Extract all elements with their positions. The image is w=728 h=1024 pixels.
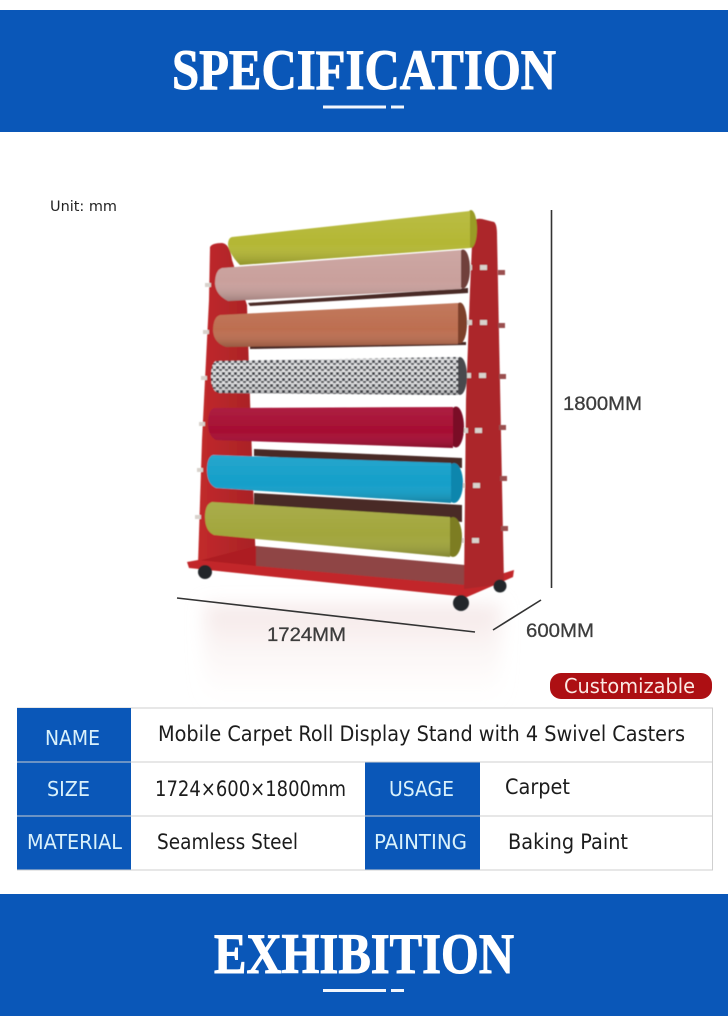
row: size and usage: SIZE bbox=[47, 777, 90, 801]
specification table bbox=[17, 708, 712, 870]
dimension: depth bbox=[493, 600, 594, 642]
row: name bbox=[45, 722, 685, 750]
bolts bbox=[195, 265, 508, 543]
header band: specification bbox=[0, 10, 728, 132]
floor reflection bbox=[205, 605, 500, 705]
title: specification: SPECIFICATION bbox=[172, 39, 556, 102]
title: exhibition: EXHIBITION bbox=[214, 923, 514, 986]
dimension: depth: 600MM bbox=[526, 620, 594, 642]
row: material and painting bbox=[27, 830, 628, 854]
product: carpet roll display stand bbox=[187, 210, 514, 611]
roll: lime bbox=[228, 210, 477, 265]
row: material and painting: Baking Paint bbox=[508, 830, 628, 854]
roll: pink bbox=[215, 250, 470, 301]
base plate bbox=[187, 560, 514, 597]
footer band: exhibition bbox=[0, 894, 728, 1016]
row: name: Mobile Carpet Roll Display Stand with 4 Swivel Casters bbox=[158, 722, 685, 746]
label cells bbox=[17, 708, 480, 870]
casters bbox=[198, 565, 506, 611]
dimension: width: 1724MM bbox=[267, 624, 346, 646]
roll: crimson bbox=[208, 406, 464, 448]
roll: olive bbox=[205, 502, 462, 557]
base shelf bbox=[256, 546, 465, 586]
roll: houndstooth bbox=[211, 357, 467, 395]
title underline bbox=[323, 106, 404, 108]
row: size and usage bbox=[47, 775, 570, 801]
back shadows bbox=[248, 288, 468, 522]
row: size and usage: USAGE bbox=[389, 777, 454, 801]
right frame bbox=[464, 219, 504, 589]
row: size and usage: Carpet bbox=[505, 775, 570, 799]
roll: terracotta bbox=[213, 302, 467, 347]
left frame bbox=[198, 243, 256, 567]
dimension: width bbox=[177, 598, 475, 646]
customizable badge: Customizable bbox=[564, 674, 695, 698]
unit note: Unit: mm bbox=[50, 199, 117, 215]
title underline bbox=[323, 989, 404, 992]
row: material and painting: Seamless Steel bbox=[157, 830, 298, 854]
row: name: NAME bbox=[45, 726, 100, 750]
row: size and usage: 1724×600×1800mm bbox=[155, 777, 346, 801]
row: material and painting: MATERIAL bbox=[27, 830, 123, 854]
dimension: height: 1800MM bbox=[563, 393, 642, 415]
row: material and painting: PAINTING bbox=[374, 830, 467, 854]
roll: blue bbox=[207, 455, 463, 503]
